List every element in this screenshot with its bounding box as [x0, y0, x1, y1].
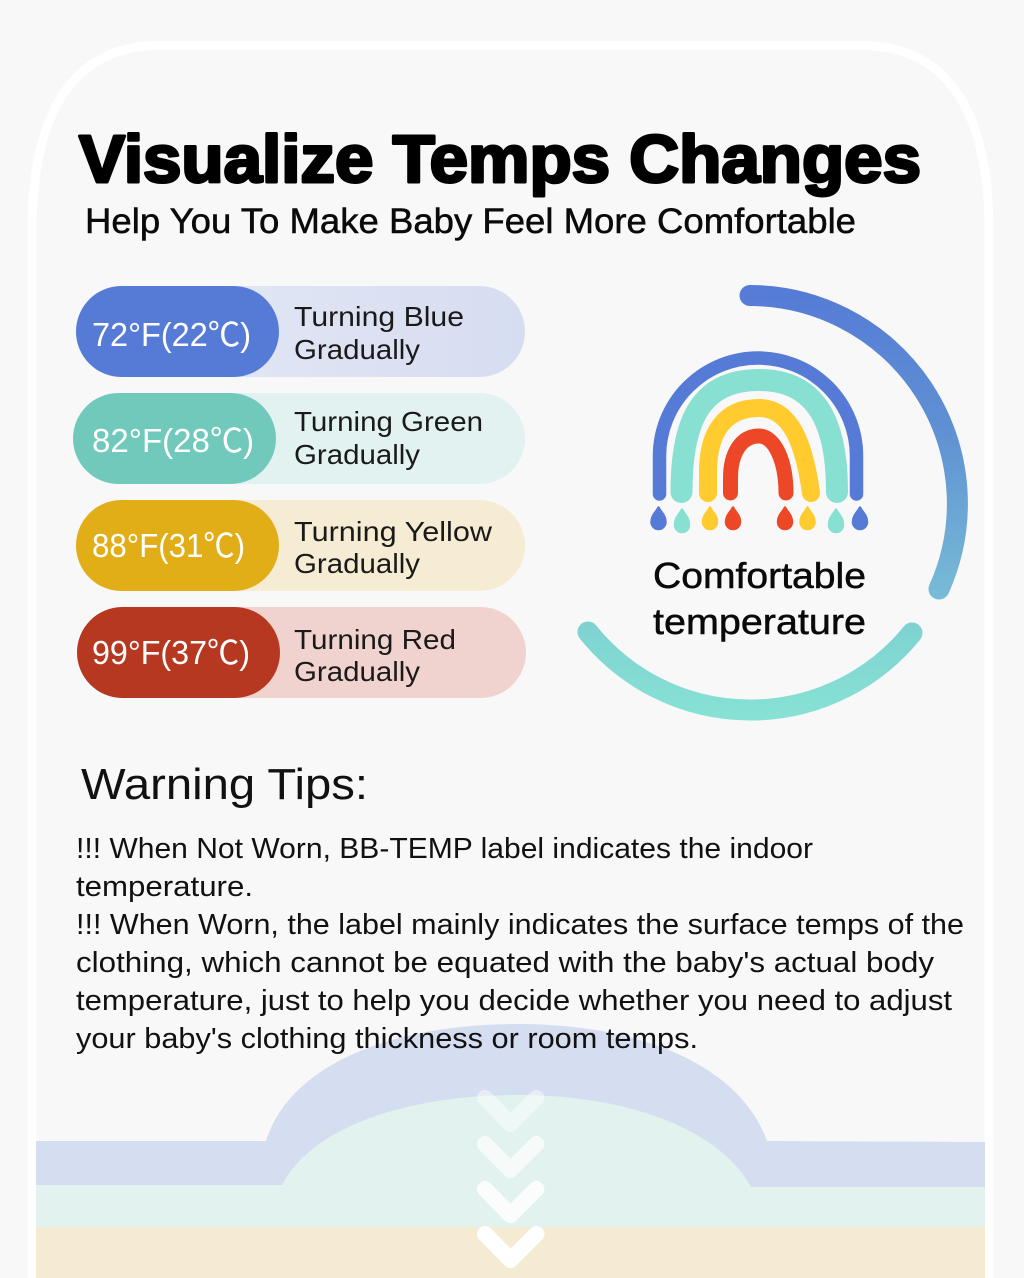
- pill: red 99F: 99°F(37℃): [92, 634, 250, 671]
- layer: blue dome: [36, 1024, 985, 1187]
- pill: yellow 88F: Gradually: [294, 548, 420, 579]
- pill: green 82F: 82°F(28℃): [92, 422, 254, 459]
- pill: red 99F: Gradually: [294, 656, 420, 687]
- warning tips text block: temperature.: [76, 871, 253, 903]
- chevron arrow 2: [485, 1144, 536, 1170]
- layer: yellow base: [36, 1227, 985, 1278]
- warning tips text block: !!! When Worn, the label mainly indicates the surface temps of the: [76, 909, 964, 941]
- warning tips text block: [76, 833, 964, 1055]
- label: comfortable temperature: [653, 555, 866, 642]
- pill: yellow 88F: Turning Yellow: [294, 516, 492, 547]
- band: red: [730, 436, 786, 493]
- pill: blue 72F: 72°F(22℃): [92, 316, 251, 353]
- heading: warning tips: Warning Tips:: [81, 760, 368, 809]
- pill: red 99F: [77, 607, 526, 698]
- pill: yellow 88F: 88°F(31℃): [92, 527, 245, 564]
- bottom fabric layers illustration: [36, 1024, 985, 1278]
- subtitle: Help You To Make Baby Feel More Comfortable: [85, 202, 856, 241]
- label: comfortable temperature: temperature: [653, 601, 866, 642]
- band: teal: [682, 380, 837, 492]
- chevron arrow 4: [485, 1234, 536, 1260]
- raindrops: [652, 508, 867, 532]
- pill: blue 72F: Gradually: [294, 334, 420, 365]
- gauge arc: teal: [588, 632, 912, 710]
- pill: yellow 88F: [76, 500, 525, 591]
- pill: green 82F: Gradually: [294, 439, 420, 470]
- warning tips text block: your baby's clothing thickness or room temps.: [76, 1023, 698, 1055]
- pill: blue 72F: [76, 286, 525, 377]
- warning tips text block: !!! When Not Worn, BB-TEMP label indicates the indoor: [76, 833, 813, 865]
- chevron arrow 3: [485, 1189, 536, 1215]
- gauge arc: blue: [750, 296, 957, 589]
- icon: rainbow: [652, 358, 867, 532]
- warning tips text block: temperature, just to help you decide whether you need to adjust: [76, 985, 952, 1017]
- pill: green 82F: [73, 393, 525, 484]
- title: Visualize Temps Changes: [79, 122, 921, 197]
- warning tips text block: clothing, which cannot be equated with the baby's actual body: [76, 947, 935, 979]
- pill: green 82F: Turning Green: [294, 406, 483, 437]
- band: yellow: [708, 408, 811, 493]
- band: blue: [660, 358, 856, 494]
- chevron arrow 1: [485, 1098, 536, 1124]
- pill: red 99F: Turning Red: [294, 624, 456, 655]
- label: comfortable temperature: Comfortable: [653, 555, 866, 596]
- layer: teal dome: [36, 1095, 985, 1227]
- pill: blue 72F: Turning Blue: [294, 301, 464, 332]
